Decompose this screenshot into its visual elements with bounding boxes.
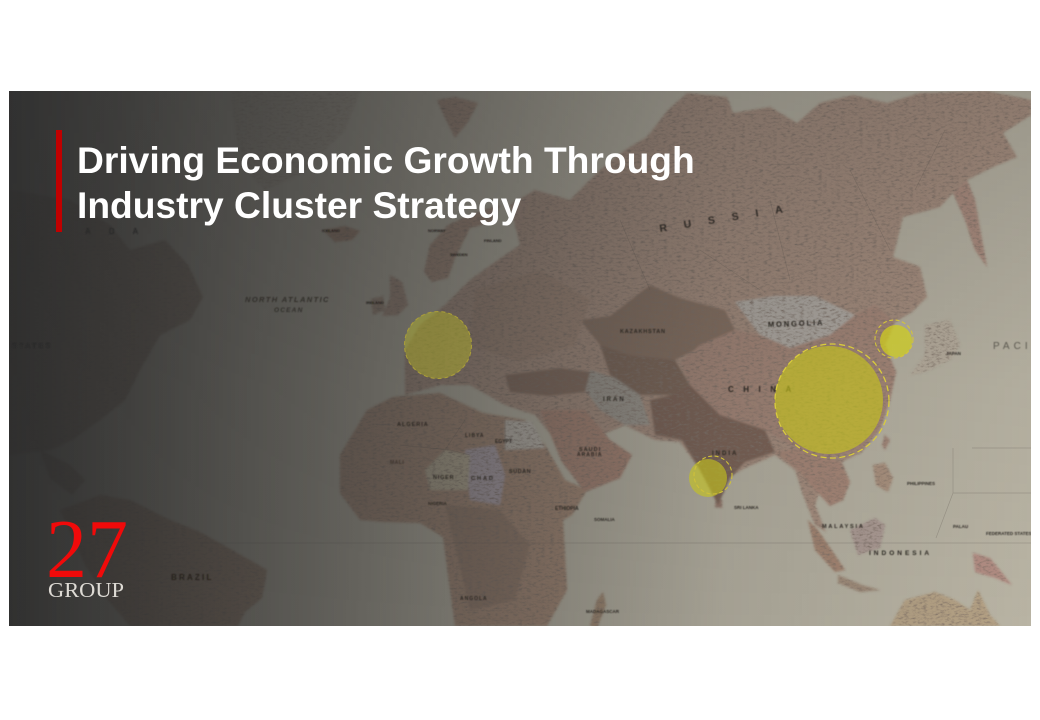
map labels: SRI LANKA [734,505,759,510]
cluster circle: Europe [404,312,472,378]
map labels: FEDERATED STATES [986,531,1032,536]
map labels: INDONESIA [869,550,932,557]
logo: 27 Group: 27 [46,503,128,596]
map labels: SUDAN [509,469,531,475]
land: Sri Lanka [715,498,722,508]
title: Driving Economic Growth Through [77,139,695,181]
land: Britain [382,275,408,316]
land: Central America [40,450,85,495]
map labels: CHAD [471,476,495,482]
land: Mongolia [735,296,855,348]
map labels: BRAZIL [171,573,214,582]
map labels: ARABIA [577,452,602,458]
land: Sumatra [808,520,845,572]
map labels: NORTH ATLANTIC [245,295,330,304]
map labels: SWEDEN [450,252,468,257]
land: Central Asia [600,345,690,395]
land: Europe tint [470,270,590,362]
land: Taiwan [882,435,890,450]
land: Southeast Asia [818,490,830,505]
title: Industry Cluster Strategy [77,184,522,226]
map labels: ETHIOPIA [555,506,579,512]
map: continents [124,91,1031,626]
land: Iran [586,373,648,424]
map labels: MONGOLIA [768,318,824,329]
land: Philippines [873,463,893,492]
cluster circle: Korea [875,320,913,358]
land: Japan [910,320,960,375]
map labels: JAPAN [946,351,961,356]
grid lines [200,130,1031,543]
land: Turkey and Middle East [505,368,590,396]
map labels: NORWAY [428,228,446,233]
map labels: PHILIPPINES [907,481,935,486]
map labels: KAZAKHSTAN [620,329,666,335]
map labels: INDIA [712,451,738,457]
map labels: EGYPT [495,439,512,445]
map labels: ALGERIA [397,422,429,428]
panel: map background [9,91,1040,628]
map labels: SAUDI [579,447,601,453]
land: Egypt [505,420,545,450]
land: Eurasia [405,91,1031,532]
infographic slide [9,91,1031,626]
map labels: IRAN [603,397,626,403]
logo: 27 Group: GROUP [48,578,124,602]
land: Svalbard [437,97,478,138]
map labels: RUSSIA [659,201,800,235]
red accent bar [56,130,62,232]
land: Scandinavia [424,205,500,282]
land: Borneo [850,518,885,555]
land: Kamchatka [953,180,987,267]
land: Greenland [279,94,352,177]
map labels: FINLAND [484,238,502,243]
map labels: OCEAN [274,307,303,314]
map labels: PALAU [953,524,968,529]
map labels: NIGERIA [428,501,448,506]
dark overlay left [9,91,1031,626]
map labels: CHINA [728,385,801,394]
land: Ireland [371,296,385,315]
map labels: STATES [12,341,52,350]
land: Australia [890,590,1000,626]
map labels: ADA [85,227,156,236]
map labels: MALAYSIA [822,524,865,530]
land: South America [124,504,266,626]
land: Kazakhstan [580,285,735,360]
map labels: LIBYA [465,433,485,439]
cluster circle: India [689,456,732,497]
land: Niger [425,450,470,490]
land: Papua [973,553,1012,585]
land: Iceland [323,226,360,242]
cluster circle: China [775,344,889,458]
map labels: MALI [390,460,404,466]
map labels: MADAGASCAR [586,609,620,614]
land: Saudi Arabia [551,432,632,492]
land: Chad [465,445,505,505]
land: Africa [340,393,587,626]
map labels: ICELAND [322,228,340,233]
land: Pakistan and India [650,385,775,505]
land: Java [838,575,880,592]
dark overlay top [9,91,1031,626]
map labels: SOMALIA [594,517,615,522]
land: North America [124,242,202,381]
land: Central Africa [454,508,528,608]
map labels: NIGER [433,475,454,481]
land: Madagascar [590,592,606,628]
map labels: IRELAND [366,300,384,305]
map labels [12,201,1040,614]
ocean [9,91,1031,626]
map labels: ANGOLA [460,596,488,602]
land: China [696,336,721,349]
